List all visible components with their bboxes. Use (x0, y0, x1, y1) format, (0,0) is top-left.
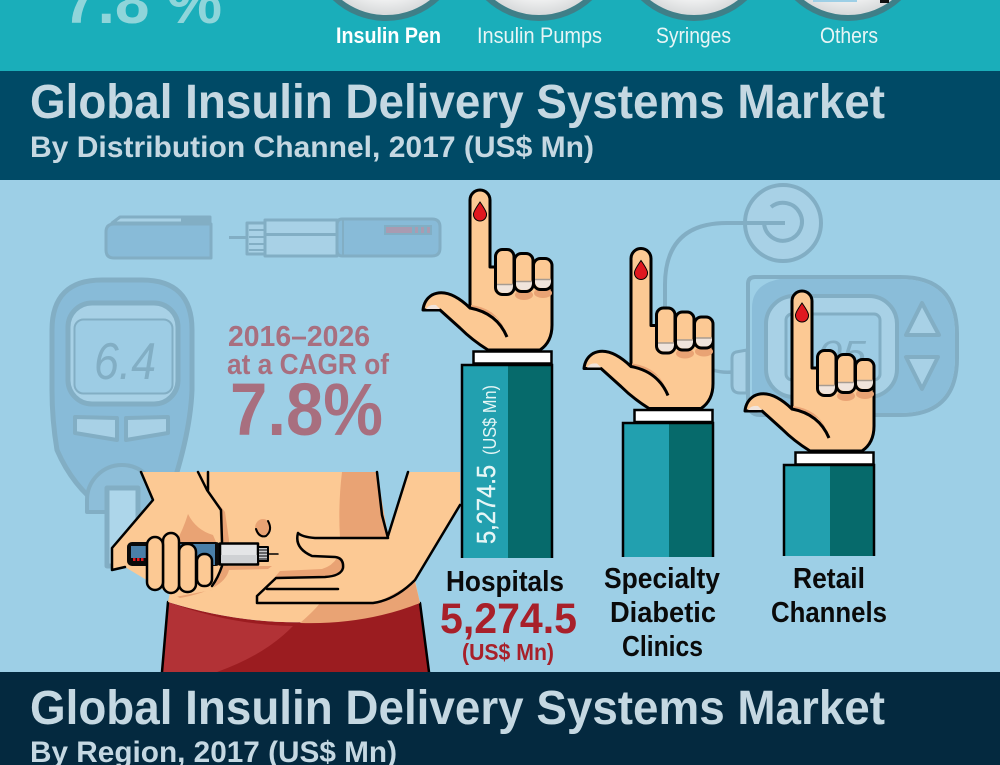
heading: distribution channel title: Global Insulin Delivery Systems Market (30, 76, 885, 129)
shorts (162, 602, 429, 672)
hand shading (176, 514, 216, 542)
value: hospitals: 5,274.5 (440, 595, 577, 643)
label: retail channels (771, 563, 887, 629)
pump reading: 05 (818, 333, 867, 374)
insulin pen in hand (127, 542, 278, 566)
icon: specialty clinics hand (584, 248, 713, 422)
bar: specialty diabetic clinics sleeve (622, 422, 713, 557)
label: insulin pen: Insulin Pen (336, 23, 441, 48)
text: forecast period and CAGR: at a CAGR of (227, 349, 389, 381)
label: others: Others (820, 23, 878, 48)
bar: retail channels sleeve (783, 464, 874, 556)
hand shadow on torso (275, 558, 343, 577)
label: hospitals: Hospitals (446, 566, 564, 598)
label: retail channels: Retail (793, 563, 865, 595)
bar unit rotated: (US$ Mn) (480, 385, 500, 455)
label: specialty diabetic clinics: Clinics (622, 631, 703, 663)
text: forecast period and CAGR (227, 321, 389, 451)
heading: region title: Global Insulin Delivery Systems Market (30, 682, 885, 735)
bar: hospitals sleeve (461, 364, 552, 558)
icon: hospitals hand (423, 190, 552, 364)
label: specialty diabetic clinics (604, 563, 720, 663)
icon: others circle (773, 0, 923, 18)
icon: insulin pump background (665, 185, 957, 415)
label: insulin pumps: Insulin Pumps (477, 23, 602, 48)
torso outline and supporting hand (257, 472, 460, 603)
text: forecast period and CAGR: 7.8% (230, 368, 383, 451)
pen shadow on torso (172, 492, 272, 598)
panel: top teal band (0, 0, 1000, 72)
panel: distribution channel heading band (0, 71, 1000, 180)
unit: hospitals: (US$ Mn) (462, 639, 554, 665)
icon: insulin pen circle (311, 0, 461, 18)
bar value rotated: 5,274.5 (471, 465, 501, 544)
icon: glucose meter background (52, 280, 192, 566)
icon: pen cap background (106, 217, 211, 258)
left arm and hand (112, 472, 222, 597)
label: specialty diabetic clinics: Specialty (604, 563, 720, 595)
icon: insulin pumps circle (464, 0, 614, 18)
panel: distribution channel illustration background (0, 180, 1000, 672)
torso skin (168, 472, 460, 622)
navel (255, 519, 271, 537)
icon: syringes circle (619, 0, 769, 18)
label: specialty diabetic clinics: Diabetic (610, 597, 716, 629)
torso shading (339, 472, 388, 538)
fingers gripping pen (147, 533, 212, 593)
label: retail channels: Channels (771, 597, 887, 629)
arm outline (112, 472, 222, 586)
text: forecast period and CAGR: 2016–2026 (228, 321, 370, 353)
icon: insulin pen background (229, 219, 440, 256)
label: syringes: Syringes (656, 23, 731, 48)
panel: region heading band (0, 672, 1000, 765)
illustration: torso and insulin injection (112, 472, 460, 672)
meter reading: 6.4 (94, 333, 156, 391)
icon: retail channels hand (745, 291, 874, 464)
subheading: distribution channel: By Distribution Channel, 2017 (US$ Mn) (30, 131, 594, 164)
hip shading (300, 582, 420, 623)
